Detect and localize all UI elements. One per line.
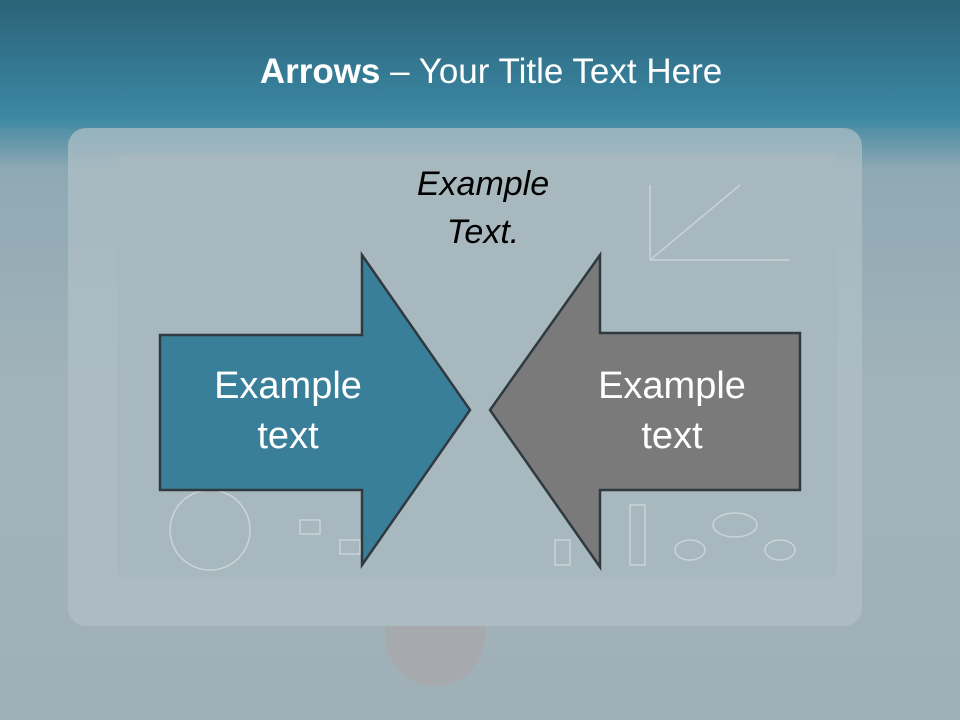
arrow: left teal pointing right: text xyxy=(257,415,319,457)
arrow: right grey pointing left: Example xyxy=(598,365,746,407)
tablet screen xyxy=(117,155,837,577)
example text callout: Text. xyxy=(447,213,519,251)
arrow: left teal pointing right: Example xyxy=(214,365,362,407)
title: Arrows – Your Title Text Here xyxy=(260,52,722,91)
example text callout xyxy=(417,165,549,251)
hand hint xyxy=(385,626,485,686)
example text callout: Example xyxy=(417,165,549,203)
tablet body xyxy=(68,128,862,626)
arrow: right grey pointing left: text xyxy=(641,415,703,457)
arrow: right grey pointing left xyxy=(490,255,800,567)
header band xyxy=(0,0,960,128)
arrow: left teal pointing right xyxy=(160,255,470,565)
